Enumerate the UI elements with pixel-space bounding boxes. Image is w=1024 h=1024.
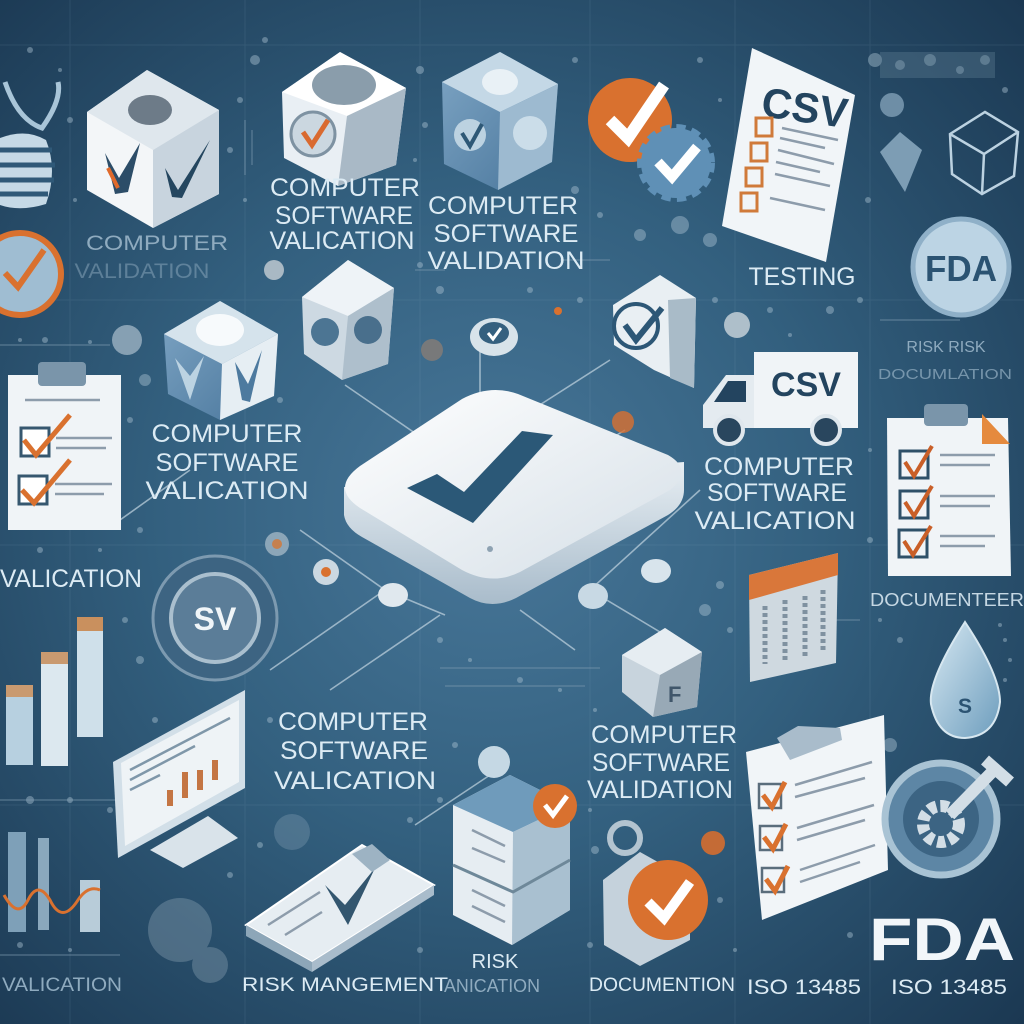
label: computer software validation 6: VALIDATION [587, 776, 733, 804]
cube: center small [302, 260, 394, 380]
label: computer software validation 5: VALICATION [274, 767, 436, 795]
label: computer software validation 6: COMPUTER [591, 721, 737, 749]
label: testing: TESTING [748, 263, 856, 291]
clipboard: right [887, 404, 1011, 576]
label: validation left: VALICATION [0, 565, 142, 593]
bar chart left [6, 617, 103, 766]
cube: top middle [282, 52, 406, 186]
monitor [113, 690, 245, 868]
cube: top center blue [442, 52, 558, 190]
icon: FDA circle: FDA [925, 248, 997, 289]
stacked boxes with badge [453, 775, 577, 945]
label: computer software validation 1: VALICATION [270, 227, 414, 255]
bottom labels [2, 951, 1007, 999]
label: computer software validation 6: SOFTWARE [592, 749, 730, 777]
small nodes [112, 260, 750, 855]
label: documentation right: DOCUMENTEER [870, 590, 1024, 610]
cube: check tile right [613, 275, 696, 388]
label: computer validation left: COMPUTER [86, 232, 228, 255]
bottom labels: VALICATION [2, 975, 122, 996]
connector lines [120, 350, 700, 825]
icon: CSV truck: CSV [771, 366, 841, 404]
checklist: lower right [746, 715, 888, 920]
central check tile [344, 390, 684, 604]
label: computer software validation 4: VALICATION [694, 507, 856, 535]
label: computer software validation 3 [146, 420, 308, 505]
label: computer software validation 6 [587, 721, 737, 804]
check mark [407, 431, 553, 523]
label: computer software validation 4 [694, 453, 856, 535]
icon: wireframe box and gem [880, 93, 1018, 194]
bottom labels: ISO 13485 [747, 976, 861, 999]
clipboard: risk management [246, 844, 434, 972]
clipboard: left [8, 362, 121, 530]
label: computer software validation 2 [428, 192, 584, 275]
document: CSV testing: CSV [759, 78, 851, 137]
label: computer software validation 2: COMPUTER [428, 192, 578, 220]
document: CSV testing [722, 48, 855, 262]
cube: left middle [164, 301, 278, 420]
label: computer validation left: VALIDATION [74, 260, 210, 283]
label: computer software validation 3: VALICATION [146, 477, 308, 505]
bottom labels: ANICATION [444, 976, 540, 996]
cube: small box lower [622, 628, 702, 717]
label: computer software validation 5 [274, 708, 436, 795]
icon: SV seal: SV [194, 601, 237, 637]
chart: bars with orange line [4, 832, 100, 932]
label: computer software validation 5: SOFTWARE [280, 737, 428, 765]
label: computer software validation 4: SOFTWARE [707, 479, 847, 507]
cube: small box lower: F [668, 682, 681, 707]
label: risk documentation [878, 339, 1012, 383]
label: risk documentation: DOCUMLATION [878, 366, 1012, 383]
label: computer software validation 2: SOFTWARE [434, 220, 578, 248]
cube: top left [87, 70, 219, 228]
gantt document [749, 553, 838, 682]
label: computer software validation 3: COMPUTER [152, 420, 302, 448]
label: computer software validation 1 [270, 174, 420, 255]
label: computer software validation 2: VALIDATION [428, 247, 584, 275]
label: computer software validation 3: SOFTWARE [156, 449, 298, 477]
badges: orange and blue gears [588, 78, 711, 198]
icon: hourglass helix [0, 82, 59, 208]
label: computer software validation 1: SOFTWARE [275, 202, 413, 230]
bottom labels: DOCUMENTION [589, 975, 735, 996]
label: risk documentation: RISK RISK [906, 339, 986, 356]
faint decorative figure [148, 52, 995, 983]
icon: CSV truck [703, 352, 858, 444]
FDA logo: FDA [869, 906, 1015, 973]
icon: SV seal [153, 556, 277, 680]
bottom labels: RISK MANGEMENT [242, 975, 448, 996]
label: computer software validation 4: COMPUTER [704, 453, 854, 481]
bottom labels: ISO 13485 [891, 976, 1007, 999]
icon: FDA circle [913, 219, 1009, 315]
padlock check [603, 823, 708, 966]
node: check small [470, 318, 518, 356]
bottom labels: RISK [472, 951, 519, 973]
icon: water drop: S [958, 695, 972, 718]
label: computer software validation 5: COMPUTER [278, 708, 428, 736]
label: computer validation left [74, 232, 228, 283]
icon: orange ring check [0, 233, 61, 315]
icon: gear ring [885, 760, 1010, 875]
icon: water drop [931, 622, 1000, 738]
label: computer software validation 1: COMPUTER [270, 174, 420, 202]
